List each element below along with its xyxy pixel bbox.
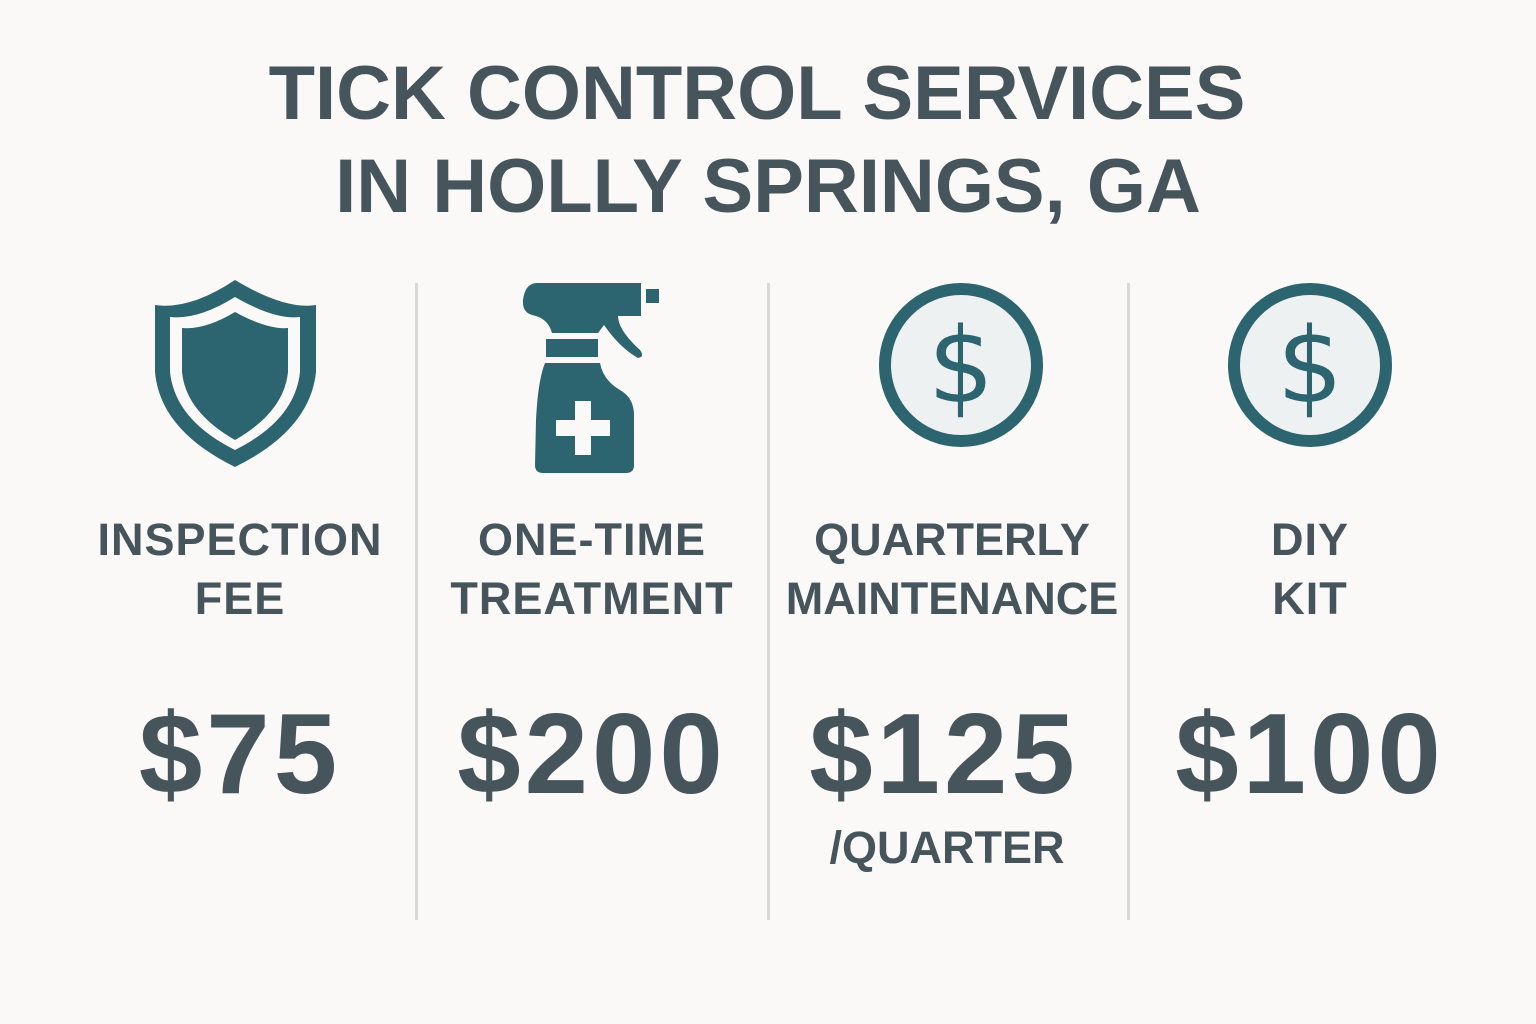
title: IN HOLLY SPRINGS, GA [335, 144, 1201, 229]
label: one-time treatment: ONE-TIME [478, 514, 706, 565]
title: TICK CONTROL SERVICES [269, 51, 1245, 136]
price: $75: $75 [139, 691, 341, 818]
price: $100: $100 [1175, 691, 1445, 818]
label: one-time treatment: TREATMENT [450, 573, 734, 624]
label: diy kit: KIT [1272, 573, 1348, 624]
price: $200: $200 [457, 691, 727, 818]
label: one-time treatment [450, 514, 734, 624]
price: $125 /quarter: /QUARTER [830, 822, 1064, 873]
icon: dollar coin 1 [885, 289, 1037, 441]
price: $125 /quarter [809, 691, 1079, 873]
label: diy kit: DIY [1271, 514, 1349, 565]
label: quarterly maintenance [786, 514, 1118, 624]
label: inspection fee: INSPECTION [97, 514, 383, 565]
icon: dollar coin 1: $ [928, 305, 994, 427]
icon: dollar coin 2 [1234, 289, 1386, 441]
title [269, 51, 1245, 229]
icon: shield [155, 280, 316, 467]
label: inspection fee [97, 514, 383, 624]
label: diy kit [1271, 514, 1349, 624]
icon: dollar coin 2: $ [1277, 305, 1343, 427]
label: quarterly maintenance: MAINTENANCE [786, 573, 1118, 624]
label: quarterly maintenance: QUARTERLY [814, 514, 1090, 565]
icon: spray bottle [523, 283, 659, 473]
price: $125 /quarter: $125 [809, 691, 1079, 818]
label: inspection fee: FEE [195, 573, 285, 624]
